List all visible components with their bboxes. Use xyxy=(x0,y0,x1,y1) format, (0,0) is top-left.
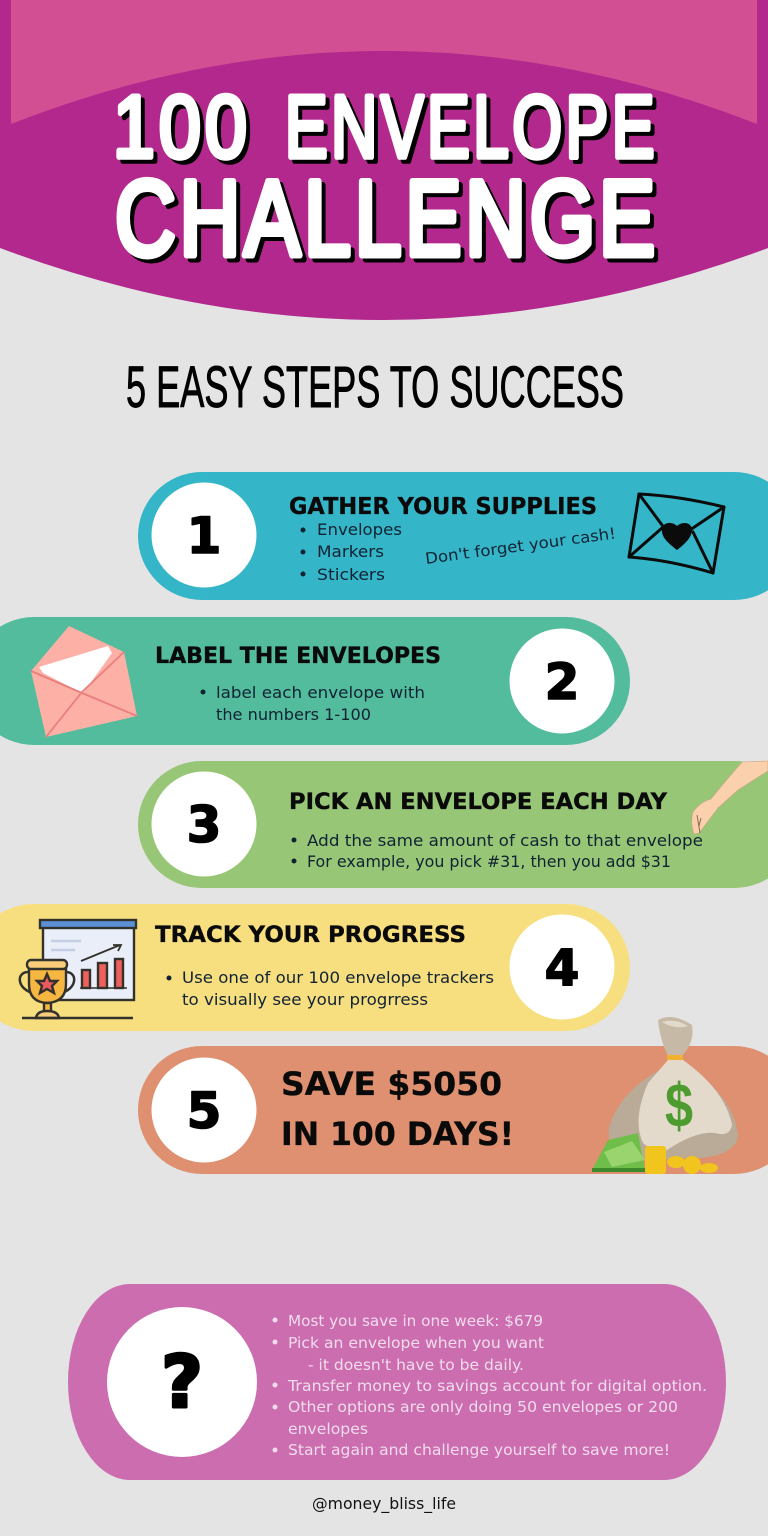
step 4 panel xyxy=(0,904,630,1031)
icon: money bag: $ xyxy=(665,1072,693,1141)
info panel: envelopes xyxy=(288,1420,368,1438)
step 1 panel: Stickers xyxy=(317,565,385,584)
icon: envelope with heart xyxy=(629,494,724,573)
social handle: @money_bliss_life xyxy=(312,1494,456,1514)
header banner xyxy=(0,0,768,320)
info panel: Transfer money to savings account for digital option. xyxy=(287,1377,707,1395)
step 5 panel xyxy=(138,1046,768,1174)
icon: hand xyxy=(692,761,768,834)
step 3 panel: For example, you pick #31, then you add $31 xyxy=(307,852,671,871)
step 5 panel: SAVE $5050 xyxy=(281,1065,502,1103)
info panel: Other options are only doing 50 envelopes or 200 xyxy=(288,1398,678,1416)
step 4 panel: TRACK YOUR PROGRESS xyxy=(155,923,466,948)
step 4 panel: to visually see your progrress xyxy=(182,990,428,1009)
icon: trophy and chart xyxy=(20,920,136,1018)
step 1 panel: Don't forget your cash! xyxy=(424,524,617,568)
info panel: ? xyxy=(161,1340,203,1424)
step 2 panel: label each envelope with xyxy=(216,683,425,702)
title: 100 xyxy=(113,77,251,176)
step 2 panel: LABEL THE ENVELOPES xyxy=(155,644,441,669)
info panel: Start again and challenge yourself to save more! xyxy=(288,1441,670,1459)
step 1 panel: 1 xyxy=(187,507,221,565)
step 5 panel: IN 100 DAYS! xyxy=(281,1115,514,1153)
step 4 panel: 4 xyxy=(545,939,579,997)
step 1 panel xyxy=(138,472,768,600)
icon: open pink envelope xyxy=(31,626,137,737)
step 2 panel: 2 xyxy=(545,653,579,711)
step 1 panel: GATHER YOUR SUPPLIES xyxy=(289,494,597,520)
title: 100 xyxy=(117,81,255,180)
title xyxy=(113,77,663,282)
step 1 panel: Markers xyxy=(317,542,384,561)
step 4 panel: Use one of our 100 envelope trackers xyxy=(182,968,494,987)
icon: money bag xyxy=(592,1017,738,1174)
step 3 panel: 3 xyxy=(187,796,221,854)
info panel: Pick an envelope when you want xyxy=(288,1334,544,1352)
step 3 panel: Add the same amount of cash to that envelope xyxy=(307,831,703,850)
step 2 panel: the numbers 1-100 xyxy=(216,705,371,724)
step 3 panel xyxy=(138,761,768,888)
info panel: Most you save in one week: $679 xyxy=(288,1312,543,1330)
step 5 panel: 5 xyxy=(187,1082,221,1140)
step 3 panel: PICK AN ENVELOPE EACH DAY xyxy=(289,790,668,815)
info panel xyxy=(68,1284,726,1480)
step 1 panel: Envelopes xyxy=(317,520,402,539)
info panel: - it doesn't have to be daily. xyxy=(308,1356,524,1374)
step 2 panel xyxy=(0,617,630,745)
